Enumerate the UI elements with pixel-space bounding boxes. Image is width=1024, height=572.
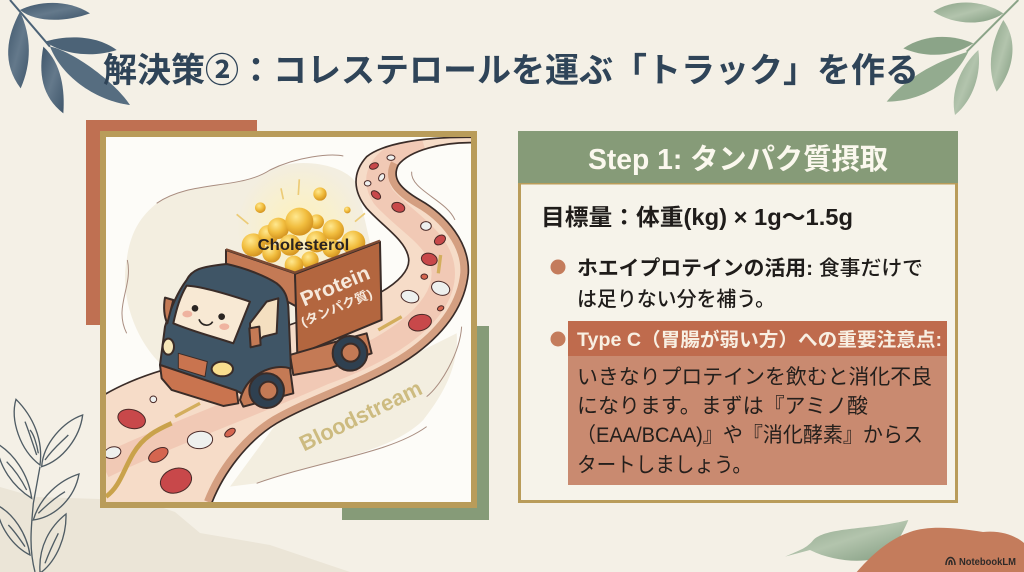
truck face [182, 305, 229, 330]
icon: sage leaf bottom right [785, 520, 908, 561]
label: Bloodstream: Bloodstream [295, 375, 426, 456]
icon: navy leaf branch top left [8, 0, 130, 113]
panel body [520, 183, 956, 502]
title: 解決策②：コレステロールを運ぶ「トラック」を作る [103, 52, 919, 90]
cholesterol balls [236, 177, 366, 272]
watermark: NotebookLM: NotebookLM [959, 556, 1016, 568]
blood cells [103, 155, 452, 497]
panel header [518, 131, 958, 183]
callout: Type C caution: になります。まずは『アミノ酸 [577, 395, 868, 418]
panel: illustration backing blocks [86, 120, 489, 520]
torn paper texture [0, 487, 350, 572]
truck [160, 241, 382, 408]
panel: Step 1 [518, 131, 958, 502]
icon: outline plant bottom left [0, 399, 83, 572]
bullet: whey protein: は足りない分を補う。 [577, 288, 775, 311]
panel: illustration frame [100, 131, 477, 508]
panel heading: Step 1: タンパク質摂取 [588, 143, 888, 176]
bloodstream road [103, 137, 473, 503]
callout: Type C caution: Type C（胃腸が弱い方）への重要注意点: [577, 328, 942, 351]
label: Cholesterol: Cholesterol [258, 237, 349, 254]
illustration: truck on bloodstream [103, 137, 473, 503]
callout: Type C caution [550, 321, 947, 485]
watercolor blob bottom right [857, 528, 1024, 572]
callout: Type C caution: （EAA/BCAA)』や『消化酵素』からス [576, 424, 923, 447]
bullet: whey protein: ホエイプロテインの活用: 食事だけで [577, 257, 923, 280]
label: タンパク質: (タンパク質) [299, 286, 374, 329]
callout: Type C caution: いきなりプロテインを飲むと消化不良 [577, 366, 932, 389]
label: Protein: Protein [297, 261, 373, 311]
target amount: 目標量：体重(kg) × 1g〜1.5g [541, 204, 853, 230]
callout: Type C caution: タートしましょう。 [577, 454, 752, 477]
icon: sage leaf branch top right [887, 0, 1018, 115]
bullet: whey protein [550, 257, 923, 311]
